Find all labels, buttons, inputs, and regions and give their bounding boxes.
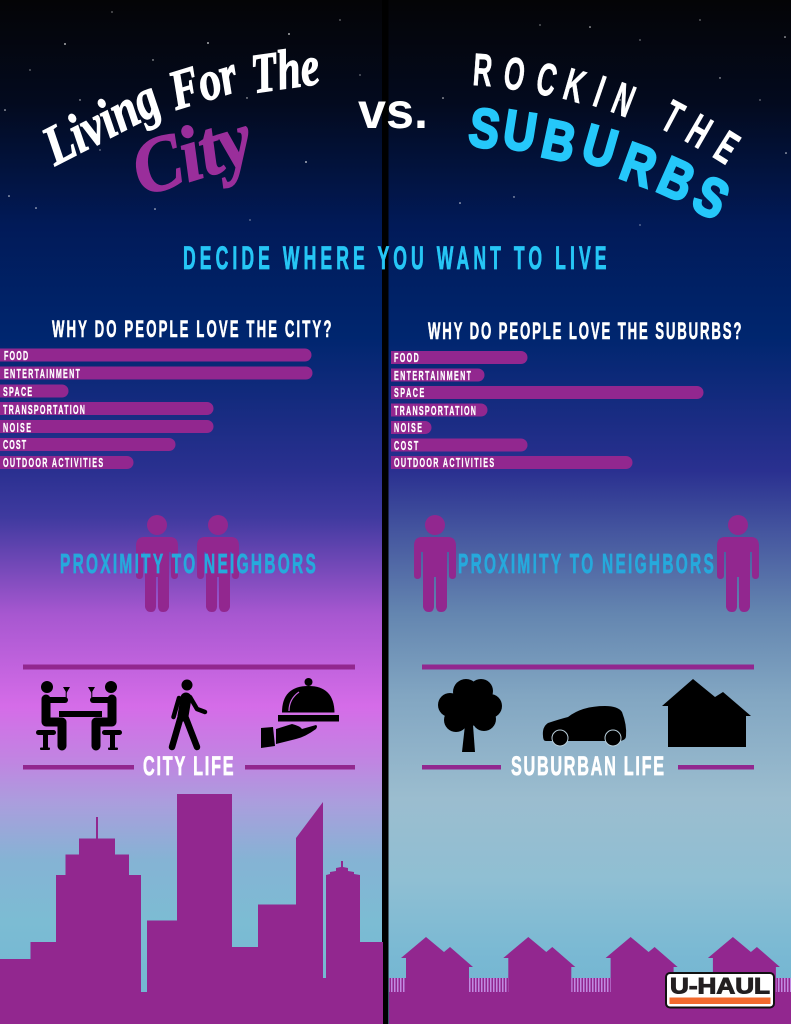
title: Living For The City: For bbox=[161, 43, 246, 123]
heading: city reasons: WHY DO PEOPLE LOVE THE CITY? bbox=[52, 316, 331, 343]
bar chart: suburb reasons bbox=[391, 351, 704, 471]
bar chart: city reasons: OUTDOOR ACTIVITIES bbox=[3, 457, 103, 471]
title: Living For The City: Living bbox=[32, 67, 170, 178]
label: city life: CITY LIFE bbox=[143, 751, 234, 781]
title: Rockin the Suburbs: O bbox=[501, 47, 528, 101]
bar chart: city reasons bbox=[0, 348, 312, 471]
title: Rockin the Suburbs: T bbox=[653, 90, 692, 143]
label: proximity to neighbors, city: PROXIMITY TO NEIGHBORS bbox=[60, 548, 316, 579]
suburban skyline: houses and fence bbox=[389, 937, 791, 1024]
title: Rockin the Suburbs: I bbox=[588, 66, 612, 117]
versus label: vs. bbox=[358, 83, 428, 139]
bar chart: city reasons: FOOD bbox=[4, 350, 28, 364]
bar chart: suburb reasons: NOISE bbox=[394, 422, 422, 436]
title: Rockin the Suburbs: N bbox=[605, 72, 642, 127]
city skyline bbox=[0, 794, 383, 1024]
title: Rockin the Suburbs: B bbox=[536, 107, 581, 175]
icon: house bbox=[662, 679, 751, 747]
panel: why people love the suburbs bbox=[391, 318, 742, 471]
title: Rockin the Suburbs: C bbox=[532, 52, 561, 107]
title: Rockin the Suburbs: E bbox=[706, 121, 748, 174]
icon: walking person bbox=[172, 680, 205, 747]
heading: suburb reasons: WHY DO PEOPLE LOVE THE SUBURBS? bbox=[428, 318, 742, 345]
bar chart: suburb reasons: OUTDOOR ACTIVITIES bbox=[394, 457, 494, 471]
center divider bbox=[382, 0, 388, 1024]
panel: city life bbox=[23, 664, 355, 781]
icon: two people at a table bbox=[36, 681, 122, 750]
title: Rockin the Suburbs: U bbox=[499, 97, 541, 164]
bar chart: city reasons: SPACE bbox=[3, 386, 32, 400]
label: proximity to neighbors, suburbs: PROXIMITY TO NEIGHBORS bbox=[458, 548, 714, 579]
main heading: DECIDE WHERE YOU WANT TO LIVE bbox=[183, 242, 607, 276]
bar chart: suburb reasons: TRANSPORTATION bbox=[394, 405, 476, 419]
bar chart: city reasons: ENTERTAINMENT bbox=[4, 368, 80, 382]
icon: tree bbox=[438, 679, 502, 752]
icon: serving cloche on hand bbox=[261, 678, 339, 748]
icon: two people far apart bbox=[414, 515, 759, 612]
bar chart: city reasons: NOISE bbox=[3, 422, 31, 436]
panel: suburban life bbox=[422, 664, 754, 781]
title: Rockin the Suburbs bbox=[465, 44, 748, 232]
bar chart: city reasons: TRANSPORTATION bbox=[3, 404, 85, 418]
label: suburban life: SUBURBAN LIFE bbox=[511, 751, 664, 781]
panel: why people love the city bbox=[0, 316, 331, 471]
icon: two people close together bbox=[136, 515, 239, 612]
title: Living For The City bbox=[32, 35, 323, 212]
bar chart: suburb reasons: COST bbox=[394, 440, 419, 454]
title: Living For The City: City bbox=[122, 94, 262, 212]
logo: U-Haul: U-HAUL bbox=[670, 974, 770, 998]
bar chart: suburb reasons: SPACE bbox=[394, 387, 424, 401]
title: Rockin the Suburbs: K bbox=[558, 58, 591, 113]
bar chart: suburb reasons: FOOD bbox=[394, 352, 419, 366]
title: Rockin the Suburbs: U bbox=[576, 112, 624, 181]
title: Rockin the Suburbs: R bbox=[613, 130, 665, 199]
title: Rockin the Suburbs: S bbox=[465, 95, 504, 161]
bar chart: suburb reasons: ENTERTAINMENT bbox=[394, 370, 471, 384]
bar chart: city reasons: COST bbox=[3, 439, 27, 453]
title: Rockin the Suburbs: H bbox=[678, 104, 720, 158]
title: Rockin the Suburbs: S bbox=[683, 163, 739, 232]
logo: U-Haul bbox=[666, 973, 774, 1008]
title: Living For The City: The bbox=[247, 35, 323, 106]
icon: car bbox=[543, 706, 626, 746]
title: Rockin the Suburbs: R bbox=[471, 44, 494, 96]
title: Rockin the Suburbs: B bbox=[649, 144, 704, 214]
